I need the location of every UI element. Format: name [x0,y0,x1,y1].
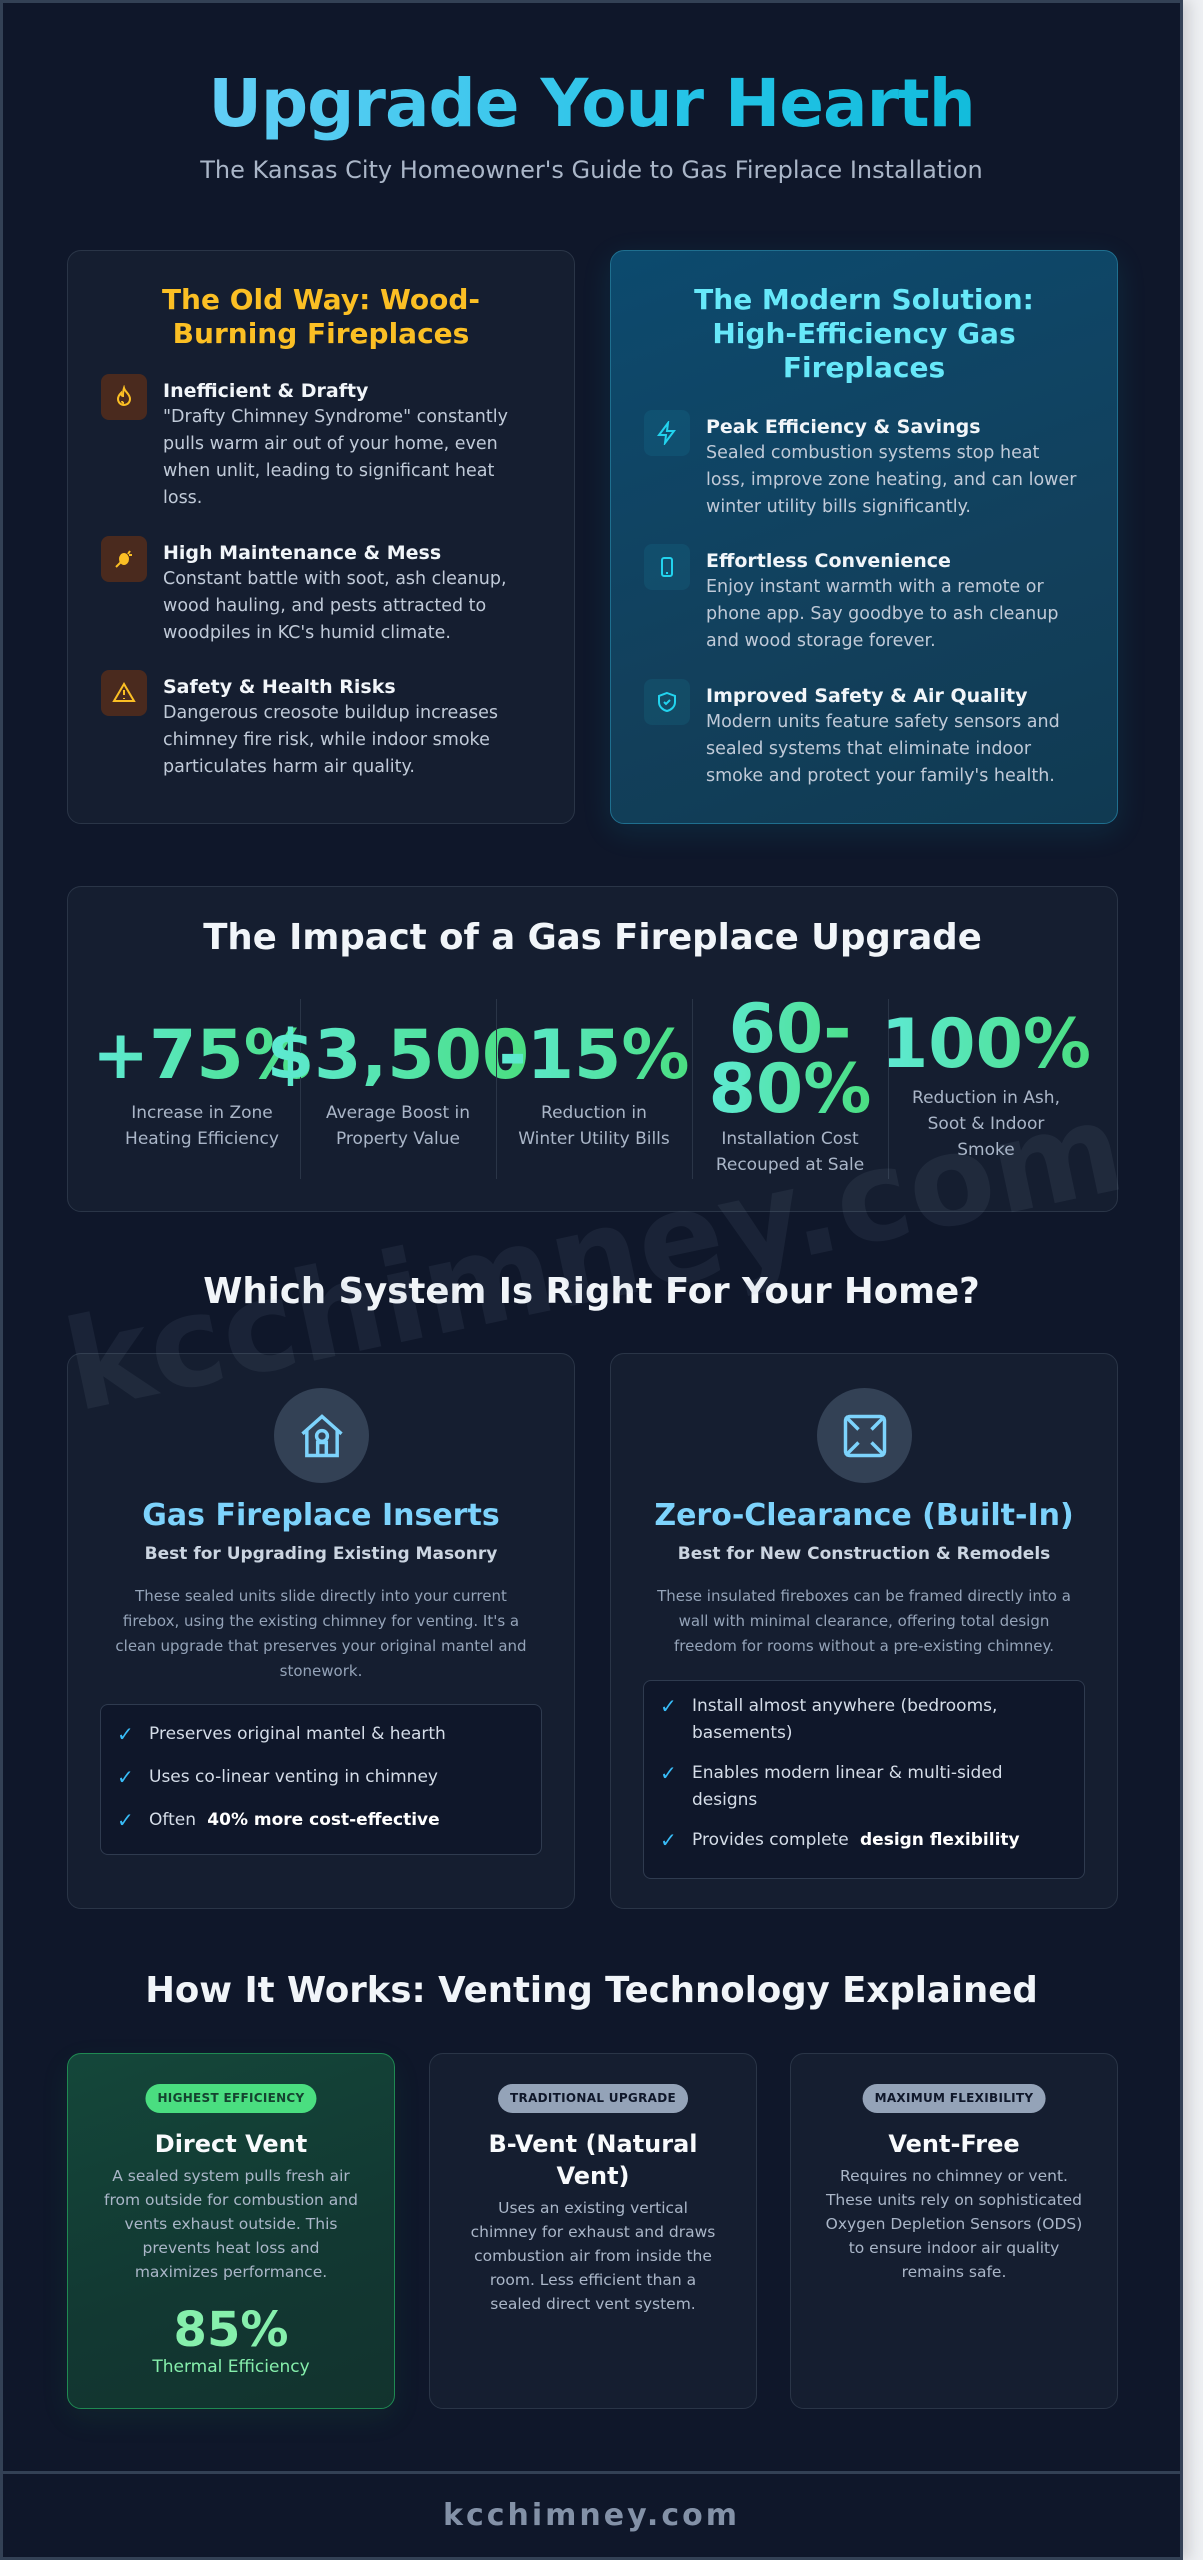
badge: HIGHEST EFFICIENCY [157,2091,305,2105]
card: direct vent [67,2053,395,2409]
icon: bug [101,536,147,582]
subtitle: Best for New Construction & Remodels [678,1544,1050,1564]
stat: property value: Average Boost in [326,1103,470,1123]
stat: utility bills: Winter Utility Bills [518,1129,670,1149]
checklist: Often 40% more cost-effective [149,1810,440,1830]
item: convenience [644,544,1058,651]
icon: shield [644,679,690,725]
item: convenience: Effortless Convenience [706,550,951,572]
stat: cost recouped: 60- [729,990,851,1069]
item: safety [644,679,1060,786]
badge [498,2084,688,2113]
description: A sealed system pulls fresh air from outside for combustion and vents exhaust outside. This prevents heat loss and maximizes performance. [104,2167,358,2281]
item: efficiency [644,410,1076,517]
panel: old way [67,250,575,824]
stat: utility bills: Reduction in [541,1103,647,1123]
stat: zone heating: Heating Efficiency [125,1129,279,1149]
badge: MAXIMUM FLEXIBILITY [875,2091,1033,2105]
icon: house [274,1388,369,1483]
stat: zone heating: +75% [92,1016,312,1095]
stat: ash reduction: Smoke [957,1140,1015,1160]
subtitle: Best for Upgrading Existing Masonry [145,1544,497,1564]
icon: phone [644,544,690,590]
stat: utility bills: -15% [498,1016,689,1095]
stat: property value: $3,500 [267,1016,529,1095]
item: maintenance [101,536,507,643]
title: B-Vent (Natural [488,2130,698,2158]
badge: TRADITIONAL UPGRADE [510,2091,676,2105]
modern heading: High-Efficiency Gas [712,317,1016,350]
badge [863,2084,1045,2113]
title [488,2130,698,2190]
checklist: Provides complete design flexibility [692,1830,1020,1850]
stat: 85%: 85% [174,2302,288,2358]
panel: modern solution [610,250,1118,824]
item: safety [101,670,498,777]
footer url: kcchimney.com [443,2498,740,2533]
stat label: Thermal Efficiency [152,2357,310,2377]
badge [145,2084,317,2113]
stat: property value: Property Value [336,1129,460,1149]
item: maintenance: High Maintenance & Mess [163,542,441,564]
item: convenience: Enjoy instant warmth with a remote or phone app. Say goodbye to ash cleanup and wood storage forever. [706,577,1058,651]
title: Vent) [556,2162,630,2190]
heading: how it works: How It Works: Venting Technology Explained [145,1970,1038,2011]
icon: expand box [817,1388,912,1483]
impact heading: The Impact of a Gas Fireplace Upgrade [203,917,982,958]
card: b-vent [429,2053,757,2409]
item: safety: Safety & Health Risks [163,676,396,698]
item: safety: Modern units feature safety sensors and sealed systems that eliminate indoor smoke and protect your family's health. [706,712,1060,786]
watermark: kcchimney.com [54,1075,1135,1440]
item: inefficient: "Drafty Chimney Syndrome" constantly pulls warm air out of your home, even when unlit, leading to significant heat loss. [163,407,508,508]
checklist [100,1704,542,1855]
modern heading: The Modern Solution: [694,283,1034,316]
checklist: Install almost anywhere (bedrooms, basements) [692,1696,997,1743]
checklist: Enables modern linear & multi-sided designs [692,1763,1003,1810]
checklist: Uses co-linear venting in chimney [149,1767,438,1787]
stat: cost recouped: 80% [709,1050,871,1129]
old way heading: Burning Fireplaces [173,317,469,350]
stat: ash reduction [881,1005,1091,1160]
item: inefficient [101,374,508,508]
description: These sealed units slide directly into your current firebox, using the existing chimney for venting. It's a clean upgrade that preserves your original mantel and stonework. [115,1587,527,1680]
modern heading: Fireplaces [783,351,945,384]
footer [3,2471,1180,2560]
stat: ash reduction: Soot & Indoor [928,1114,1044,1134]
item: inefficient: Inefficient & Drafty [163,380,368,402]
stat: ash reduction: Reduction in Ash, [912,1088,1060,1108]
heading: which system: Which System Is Right For Your Home? [203,1271,980,1312]
item: maintenance: Constant battle with soot, ash cleanup, wood hauling, and pests attracted to woodpiles in KC's humid climate. [163,569,507,643]
card: zero clearance [610,1353,1118,1909]
stat: cost recouped [709,990,871,1175]
description: Requires no chimney or vent. These units rely on sophisticated Oxygen Depletion Sensors (ODS) to ensure indoor air quality remains safe. [826,2167,1082,2281]
icon: bolt [644,410,690,456]
stat: cost recouped: Installation Cost [721,1129,859,1149]
subtitle: The Kansas City Homeowner's Guide to Gas Fireplace Installation [200,156,983,184]
stat: ash reduction: 100% [881,1005,1091,1084]
stat: cost recouped: Recouped at Sale [716,1155,864,1175]
stats row [92,990,1091,1179]
description: Uses an existing vertical chimney for exhaust and draws combustion air from inside the room. Less efficient than a sealed direct vent system. [471,2199,715,2313]
title: Upgrade Your Hearth [208,65,975,142]
modern heading [694,283,1034,384]
icon: warning [101,670,147,716]
title [3,61,1180,147]
icon: flame [101,374,147,420]
description: These insulated fireboxes can be framed directly into a wall with minimal clearance, offering total design freedom for rooms without a pre-existing chimney. [657,1587,1071,1655]
title: Zero-Clearance (Built-In) [654,1498,1074,1533]
item: safety: Improved Safety & Air Quality [706,685,1028,707]
card: gas inserts [67,1353,575,1909]
old way heading [162,283,480,350]
checklist: Preserves original mantel & hearth [149,1724,446,1744]
stat: property value [267,1016,529,1149]
old way heading: The Old Way: Wood- [162,283,480,316]
panel: impact stats [67,886,1118,1212]
title: Vent-Free [888,2130,1020,2158]
stat: zone heating: Increase in Zone [131,1103,273,1123]
stat: zone heating [92,1016,312,1149]
item: safety: Dangerous creosote buildup increases chimney fire risk, while indoor smoke particulates harm air quality. [163,703,498,777]
item: efficiency: Peak Efficiency & Savings [706,416,981,438]
card: vent-free [790,2053,1118,2409]
title: Gas Fireplace Inserts [142,1498,500,1533]
title: Direct Vent [155,2130,307,2158]
stat: utility bills [498,1016,689,1149]
checklist [643,1680,1085,1879]
item: efficiency: loss, improve zone heating, and can lower winter utility bills significantly. [706,470,1076,517]
item: efficiency: Sealed combustion systems stop heat [706,443,1039,463]
